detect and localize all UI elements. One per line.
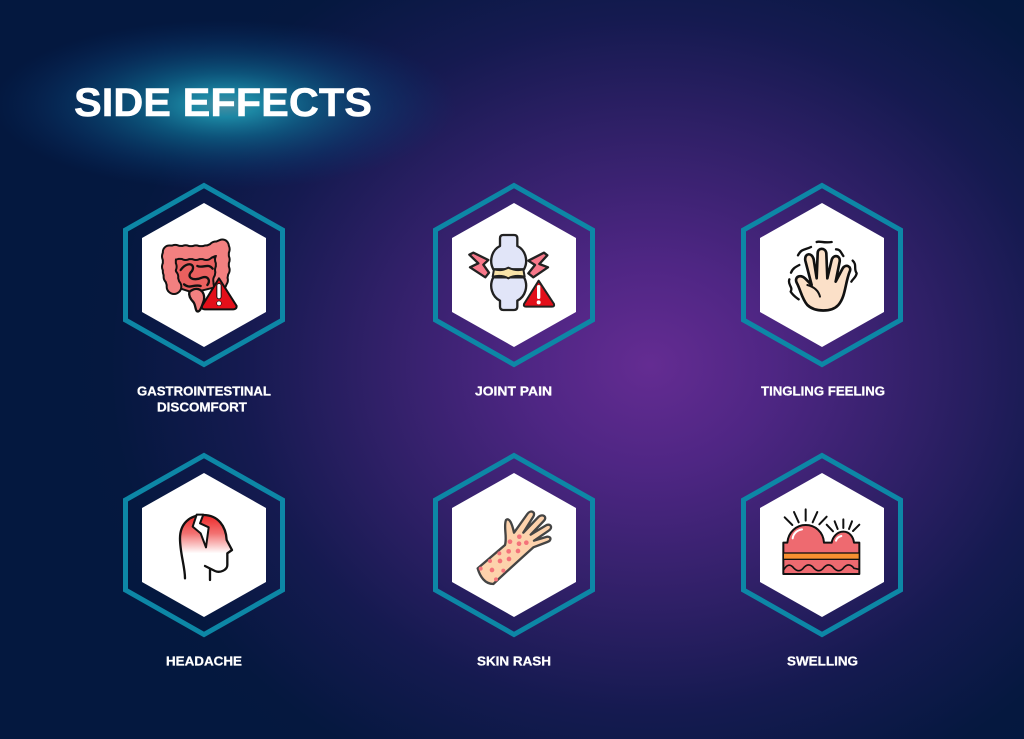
- icon: swollen skin: [783, 509, 859, 574]
- label: [137, 384, 271, 414]
- hexagon frame: [126, 186, 282, 364]
- label: JOINT PAIN: [475, 384, 552, 398]
- icon: intestines with warning: [169, 246, 237, 311]
- label: SKIN RASH: [477, 654, 551, 668]
- icon: head with lightning: [180, 515, 232, 580]
- hexagon frame: [744, 456, 900, 634]
- label: HEADACHE: [166, 654, 242, 668]
- icon: joint with warning: [469, 235, 554, 310]
- hexagon frame: [436, 456, 592, 634]
- icon: trembling hand: [789, 242, 857, 310]
- panel: swelling: [744, 456, 900, 668]
- label: SWELLING: [787, 654, 858, 668]
- panel: headache: [126, 456, 282, 668]
- panel: skin rash: [436, 456, 592, 668]
- label: DISCOMFORT: [157, 400, 247, 414]
- panel: gastrointestinal discomfort: [126, 186, 282, 414]
- panel: tingling feeling: [744, 186, 900, 398]
- title: SIDE EFFECTS: [74, 81, 372, 125]
- panel: joint pain: [436, 186, 592, 398]
- hexagon frame: [744, 186, 900, 364]
- hexagon frame: [436, 186, 592, 364]
- label: GASTROINTESTINAL: [137, 384, 271, 398]
- icon: arm with rash: [478, 512, 551, 584]
- label: TINGLING FEELING: [761, 384, 885, 398]
- hexagon frame: [126, 456, 282, 634]
